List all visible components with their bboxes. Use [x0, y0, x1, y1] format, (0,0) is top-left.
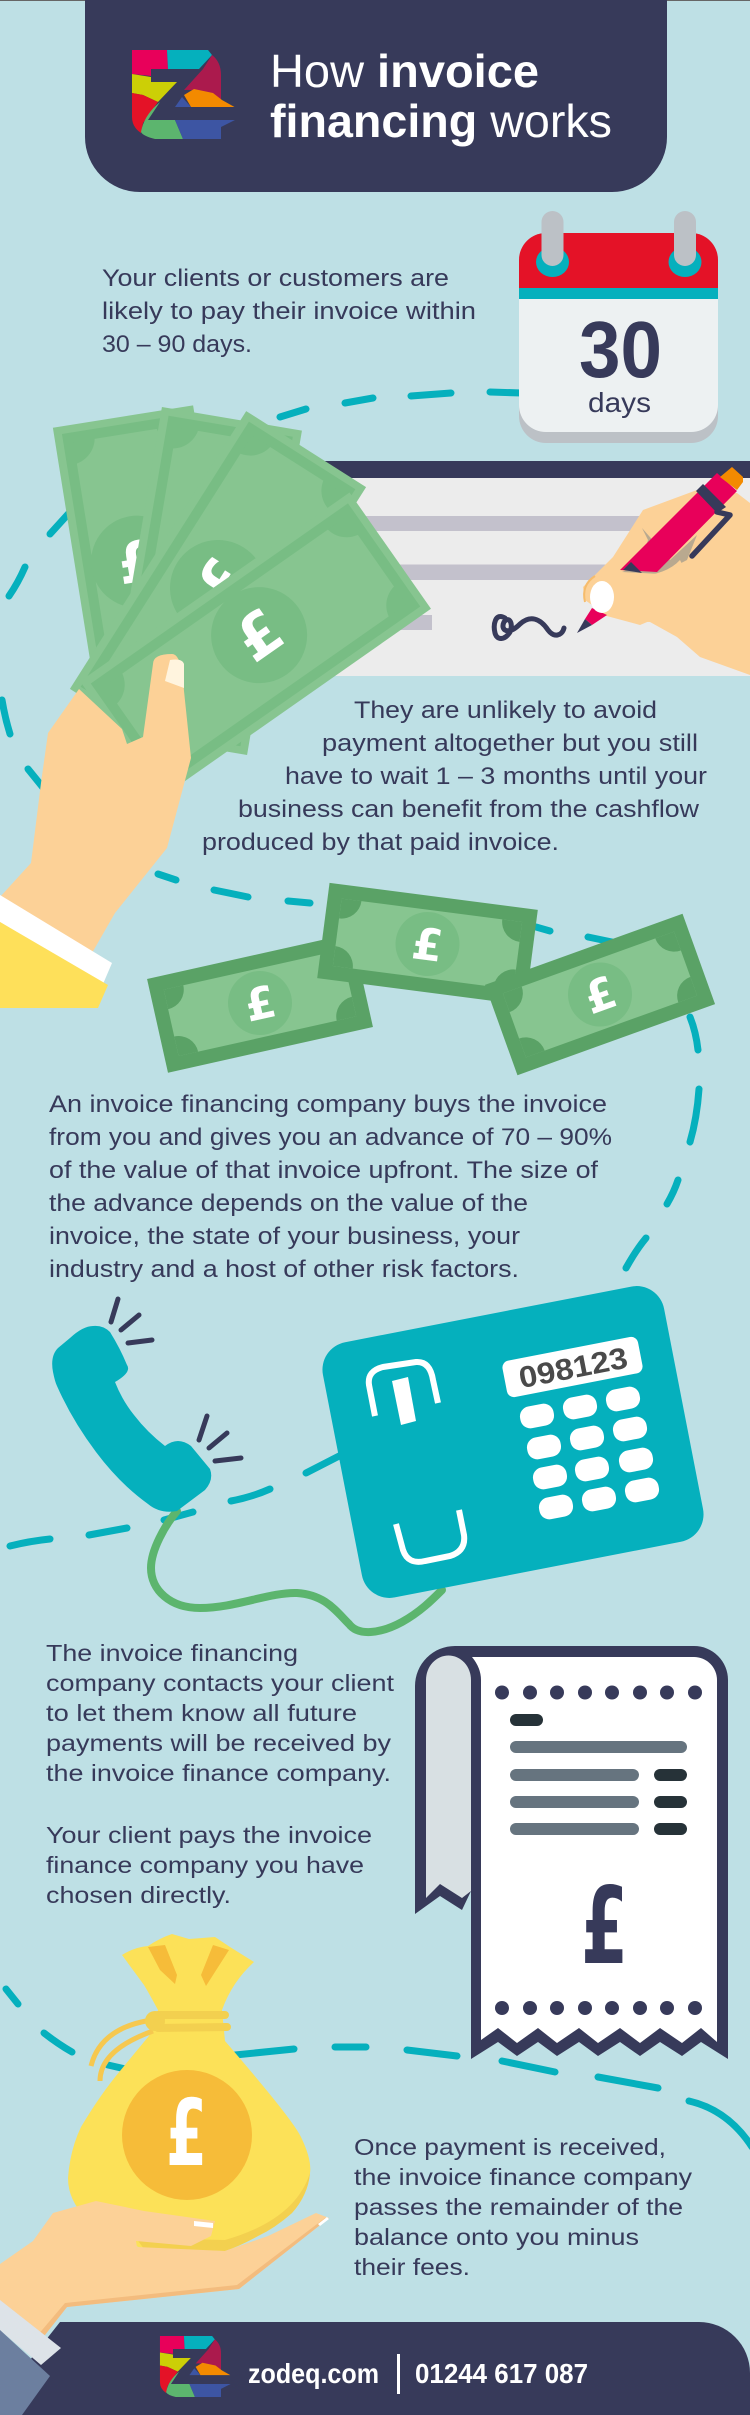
text: advance explanation: from you and gives you an advance of 70 – 90% [49, 1124, 612, 1151]
text: advance explanation: of the value of that invoice upfront. The size of [49, 1157, 598, 1184]
dashed path connecting the steps [2, 392, 750, 2147]
text: waiting for cashflow: have to wait 1 – 3 months until your [285, 763, 707, 790]
text: advance explanation [49, 1091, 612, 1283]
text: waiting for cashflow: business can benefit from the cashflow [238, 796, 700, 823]
text: waiting for cashflow: They are unlikely to avoid [354, 697, 657, 724]
icon: hand holding money bag [0, 2201, 329, 2415]
banknote 3 [70, 411, 366, 706]
banknote 2 [130, 407, 302, 755]
number display: 098123 [516, 1342, 630, 1395]
cradle marks [369, 1362, 464, 1562]
text: contacting the client [46, 1640, 395, 1908]
icon: three banknotes [140, 876, 723, 1083]
icon: telephone cord [151, 1511, 442, 1632]
text: waiting for cashflow [202, 697, 707, 856]
line items [510, 1714, 687, 1835]
title: financing works [270, 95, 612, 147]
icon: fan of banknotes [52, 405, 431, 782]
icon: receipt: £ [581, 1865, 628, 1988]
banknote 1 [52, 405, 194, 658]
keypad [518, 1385, 661, 1521]
text: balance paid out: their fees. [354, 2254, 470, 2280]
text: contacting the client: The invoice financing [46, 1640, 298, 1666]
signature [494, 616, 564, 639]
footer phone number: 01244 617 087 [415, 2358, 588, 2389]
banknote right [485, 914, 715, 1076]
text: payment window: Your clients or customers are [102, 265, 449, 292]
text: contacting the client: payments will be received by [46, 1730, 392, 1756]
banknote middle [317, 882, 538, 1001]
logo [132, 50, 235, 139]
footer bar [20, 2322, 750, 2415]
banknote right: £ [577, 967, 624, 1025]
text: advance explanation: An invoice financing company buys the invoice [49, 1091, 607, 1118]
icon: money bag: £ [166, 2080, 207, 2187]
banknote left [147, 940, 373, 1073]
header banner [85, 0, 667, 192]
banknote 4 (front): £ [223, 595, 297, 677]
icon: hand holding banknotes [0, 654, 191, 1008]
document being signed [250, 461, 750, 676]
icon: telephone handset [52, 1299, 241, 1512]
title: How invoice [270, 45, 539, 97]
text: waiting for cashflow: payment altogether but you still [322, 730, 698, 757]
text: contacting the client: company contacts your client [46, 1670, 395, 1696]
banknote 4 (front) [82, 492, 431, 782]
text: advance explanation: invoice, the state of your business, your [49, 1223, 520, 1250]
banknote left: £ [240, 976, 281, 1033]
text: balance paid out: balance onto you minus [354, 2224, 639, 2250]
text: payment window: 30 – 90 days. [102, 331, 252, 358]
ringing ticks [111, 1299, 241, 1461]
icon: calendar 30 days [519, 211, 718, 443]
text: balance paid out: passes the remainder of the [354, 2194, 683, 2220]
icon: hand writing with pen [577, 467, 750, 675]
text: contacting the client: the invoice finance company. [46, 1760, 391, 1786]
text: balance paid out: the invoice finance company [354, 2164, 693, 2190]
title [270, 45, 612, 147]
icon: receipt [415, 1646, 728, 2059]
icon: telephone base [318, 1281, 708, 1603]
drawstring [158, 2015, 227, 2028]
banknote 1: £ [113, 528, 162, 598]
footer logo [160, 2336, 231, 2397]
icon: calendar 30 days: days [588, 387, 651, 418]
text: advance explanation: industry and a host of other risk factors. [49, 1256, 519, 1283]
text: balance paid out [354, 2134, 693, 2280]
text: contacting the client: chosen directly. [46, 1882, 231, 1908]
text: payment window: likely to pay their invoice within [102, 298, 476, 325]
perforation dots [495, 1686, 702, 2015]
text: contacting the client: finance company you have [46, 1852, 364, 1878]
text: contacting the client: to let them know all future [46, 1700, 357, 1726]
footer website: zodeq.com [248, 2358, 379, 2389]
text: contacting the client: Your client pays the invoice [46, 1822, 372, 1848]
banknote 3: £ [183, 546, 262, 617]
icon: calendar 30 days: 30 [579, 305, 662, 394]
text: payment window [102, 265, 476, 358]
text: waiting for cashflow: produced by that paid invoice. [202, 829, 559, 856]
number display [501, 1336, 644, 1398]
icon: money bag [68, 1934, 310, 2251]
text: advance explanation: the advance depends on the value of the [49, 1190, 528, 1217]
banknote middle: £ [409, 918, 446, 973]
text: balance paid out: Once payment is received, [354, 2134, 666, 2160]
